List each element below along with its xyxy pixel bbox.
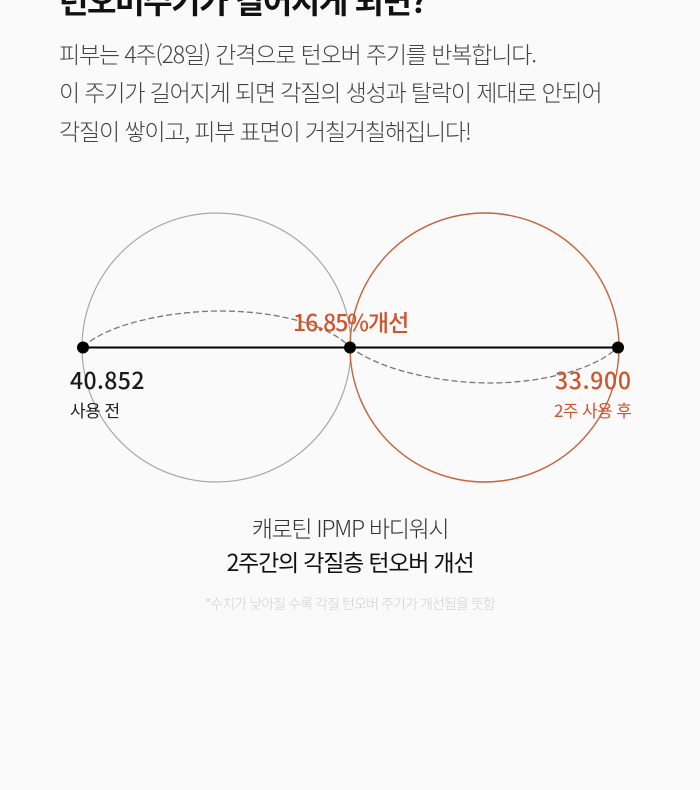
connecting line [83, 346, 618, 348]
body text [59, 36, 602, 147]
caption line 2: 2주간의 각질층 턴오버 개선 [227, 544, 473, 578]
point: after [612, 342, 624, 354]
point: middle [344, 342, 356, 354]
point: before [77, 342, 89, 354]
value: after: 33.900 [555, 362, 632, 396]
footnote: *수치가 낮아질 수록 각질 턴오버 주기가 개선됨을 뜻함 [205, 594, 495, 614]
body text: 피부는 4주(28일) 간격으로 턴오버 주기를 반복합니다. [59, 36, 536, 70]
body text: 이 주기가 길어지게 되면 각질의 생성과 탈락이 제대로 안되어 [59, 74, 602, 108]
circle: after [350, 213, 619, 482]
dashed arc: lower [350, 347, 618, 383]
label: after: 2주 사용 후 [554, 397, 631, 422]
improvement label: 16.85%개선 [293, 304, 408, 338]
value: before: 40.852 [70, 362, 145, 396]
caption line 1: 캐로틴 IPMP 바디워시 [252, 510, 448, 544]
body text: 각질이 쌓이고, 피부 표면이 거칠거칠해집니다! [59, 113, 471, 147]
label: before: 사용 전 [70, 397, 120, 422]
dashed arc: upper [83, 311, 350, 347]
circle: before [82, 213, 351, 482]
